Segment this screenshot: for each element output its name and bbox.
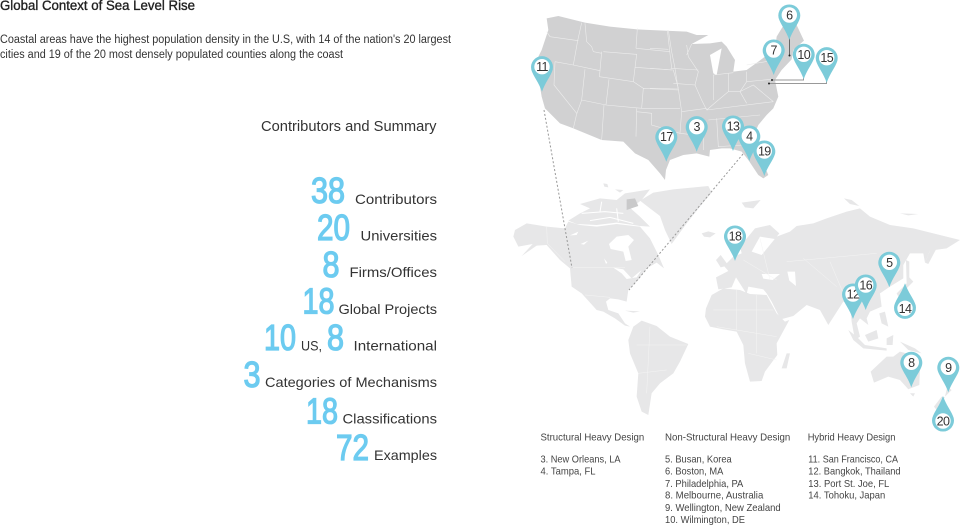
pin 11 bbox=[531, 56, 553, 92]
madagascar bbox=[782, 353, 790, 368]
iceland bbox=[702, 231, 716, 237]
legend: hybrid heavy design: 13. Port St. Joe, FL bbox=[808, 478, 889, 490]
summary statistics: 18 bbox=[302, 280, 334, 322]
south america bbox=[628, 321, 688, 415]
pin 18 bbox=[724, 225, 746, 261]
summary statistics: 18 bbox=[306, 390, 338, 432]
pin 15 bbox=[816, 47, 838, 83]
pin 19: 19 bbox=[758, 144, 771, 158]
pin 15: 15 bbox=[820, 51, 834, 65]
pin 17: 17 bbox=[660, 130, 673, 144]
legend: structural heavy design bbox=[540, 432, 644, 478]
leader lines for northeast pins bbox=[768, 38, 826, 84]
hudson bay bbox=[609, 235, 634, 261]
eastern state lines bbox=[650, 30, 775, 150]
intro text bbox=[0, 34, 452, 61]
pin 12 bbox=[842, 283, 864, 319]
contributors heading: Contributors and Summary bbox=[261, 119, 437, 135]
lake michigan bbox=[710, 48, 722, 75]
summary statistics: 72 bbox=[336, 427, 369, 468]
southeast asia islands bbox=[848, 312, 922, 353]
pin 20 bbox=[932, 396, 954, 432]
pin 10 bbox=[793, 44, 815, 79]
pin 7 bbox=[763, 39, 785, 75]
japan bbox=[897, 260, 913, 297]
australia bbox=[871, 352, 920, 389]
legend: hybrid heavy design bbox=[808, 432, 901, 502]
summary statistics: International bbox=[354, 338, 437, 354]
kamchatka bbox=[925, 245, 938, 264]
dotted connector: us west bbox=[544, 110, 572, 268]
pin 5: 5 bbox=[886, 256, 893, 270]
legend: non-structural heavy design: 7. Philadelphia, PA bbox=[665, 478, 743, 490]
cuba bbox=[625, 311, 640, 313]
us map bbox=[538, 16, 804, 180]
summary statistics bbox=[244, 170, 437, 468]
pin 12: 12 bbox=[847, 288, 860, 302]
summary statistics: Universities bbox=[360, 228, 437, 244]
summary statistics: Examples bbox=[374, 447, 437, 463]
summary statistics: 3 bbox=[244, 354, 260, 395]
caspian sea bbox=[787, 272, 796, 286]
asia borders bbox=[743, 238, 877, 293]
legend: hybrid heavy design: 12. Bangkok, Thailand bbox=[808, 466, 901, 478]
pin 6: 6 bbox=[786, 8, 793, 22]
arctic channels bbox=[582, 202, 633, 223]
pin 8 bbox=[900, 352, 922, 387]
pin 13 bbox=[722, 115, 744, 151]
legend: non-structural heavy design: 9. Wellington, New Zealand bbox=[665, 502, 781, 514]
africa bbox=[705, 288, 789, 382]
legend: hybrid heavy design: 14. Tohoku, Japan bbox=[808, 490, 885, 502]
pin 3 bbox=[686, 116, 708, 152]
pin 19 bbox=[753, 140, 775, 176]
western state lines bbox=[547, 23, 680, 140]
summary statistics: Firms/Offices bbox=[350, 264, 437, 280]
intro text: cities and 19 of the 20 most densely populated counties along the coast bbox=[0, 49, 344, 61]
pin 4 bbox=[738, 125, 760, 161]
summary statistics: Contributors bbox=[355, 191, 437, 207]
summary statistics: Classifications bbox=[342, 410, 437, 426]
americas and africa borders bbox=[547, 227, 777, 393]
new zealand bbox=[934, 387, 952, 410]
legend: non-structural heavy design: 8. Melbourne, Australia bbox=[665, 490, 763, 502]
svalbard and arctic islands bbox=[742, 198, 918, 215]
pin 14 bbox=[894, 283, 916, 319]
legend: hybrid heavy design: 11. San Francisco, CA bbox=[808, 454, 898, 466]
legend: structural heavy design: 3. New Orleans, LA bbox=[540, 454, 620, 466]
legend: non-structural heavy design bbox=[665, 432, 790, 525]
legend: non-structural heavy design: 5. Busan, Korea bbox=[665, 454, 732, 466]
pin 18: 18 bbox=[729, 230, 742, 244]
summary statistics: US, bbox=[301, 338, 322, 354]
pin 17 bbox=[655, 126, 677, 162]
pin 8: 8 bbox=[908, 356, 915, 370]
summary statistics: 38 bbox=[311, 170, 345, 211]
eurasia mainland bbox=[716, 208, 960, 340]
dotted connector: us east bbox=[629, 154, 743, 290]
pin 14: 14 bbox=[899, 302, 912, 316]
arctic islands bbox=[568, 189, 650, 227]
summary statistics: Categories of Mechanisms bbox=[265, 374, 437, 390]
summary statistics: 8 bbox=[327, 317, 344, 358]
legend: non-structural heavy design: Non-Structural Heavy Design bbox=[665, 432, 790, 444]
intro text: Coastal areas have the highest population density in the U.S, with 14 of the nation's 20 largest bbox=[0, 34, 452, 46]
pin 16 bbox=[855, 274, 877, 310]
pin 20: 20 bbox=[937, 414, 950, 428]
pin 10: 10 bbox=[797, 48, 811, 62]
tasmania bbox=[910, 393, 915, 397]
legend: structural heavy design: Structural Heavy Design bbox=[540, 432, 644, 444]
eurasia map bbox=[702, 198, 960, 340]
small arctic island bbox=[603, 183, 623, 193]
pin 5 bbox=[878, 252, 900, 287]
world map bbox=[513, 183, 952, 415]
pin 3: 3 bbox=[694, 120, 701, 134]
pin 13: 13 bbox=[727, 120, 740, 134]
greenland bbox=[640, 186, 712, 244]
pin 9 bbox=[937, 357, 959, 392]
legend: hybrid heavy design: Hybrid Heavy Design bbox=[808, 432, 896, 444]
pin 6 bbox=[778, 4, 800, 40]
pin 4: 4 bbox=[746, 130, 753, 144]
black sea bbox=[762, 274, 780, 280]
legend: non-structural heavy design: 6. Boston, MA bbox=[665, 466, 723, 478]
us outline bbox=[538, 16, 804, 180]
pin 11: 11 bbox=[536, 60, 549, 74]
pin 9: 9 bbox=[945, 361, 952, 375]
summary statistics: Global Projects bbox=[338, 301, 437, 317]
north america bbox=[513, 222, 664, 327]
summary statistics: 8 bbox=[322, 244, 340, 285]
pin 7: 7 bbox=[771, 44, 778, 58]
pin 16: 16 bbox=[859, 278, 873, 292]
united kingdom bbox=[716, 255, 728, 267]
summary statistics: 20 bbox=[317, 207, 350, 248]
legend: structural heavy design: 4. Tampa, FL bbox=[540, 466, 596, 478]
summary statistics: 10 bbox=[264, 317, 296, 358]
canadian lakes bbox=[570, 232, 642, 279]
baffin highlight bbox=[627, 198, 638, 210]
